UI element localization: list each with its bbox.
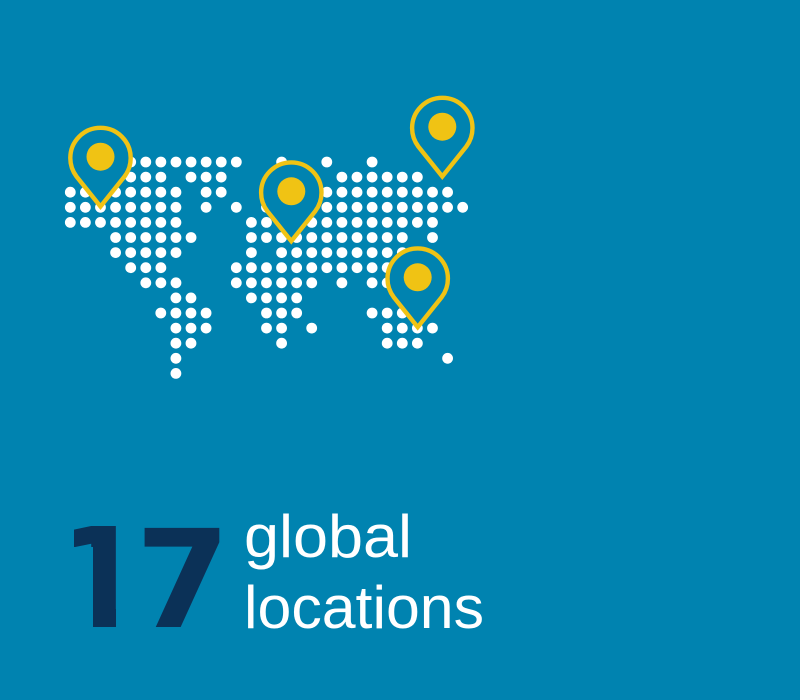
big number: 1 [52,498,148,660]
caption: global [244,503,412,570]
pin: Americas [70,128,131,206]
infographic [64,96,482,628]
caption: locations [244,574,484,641]
dotted world map [70,162,463,373]
caption [244,503,484,641]
big number: 7 [136,502,230,660]
pin: Southeast Asia [388,248,448,327]
pin: Europe [261,162,322,241]
big number [74,526,220,627]
pin: North Asia [412,98,472,176]
